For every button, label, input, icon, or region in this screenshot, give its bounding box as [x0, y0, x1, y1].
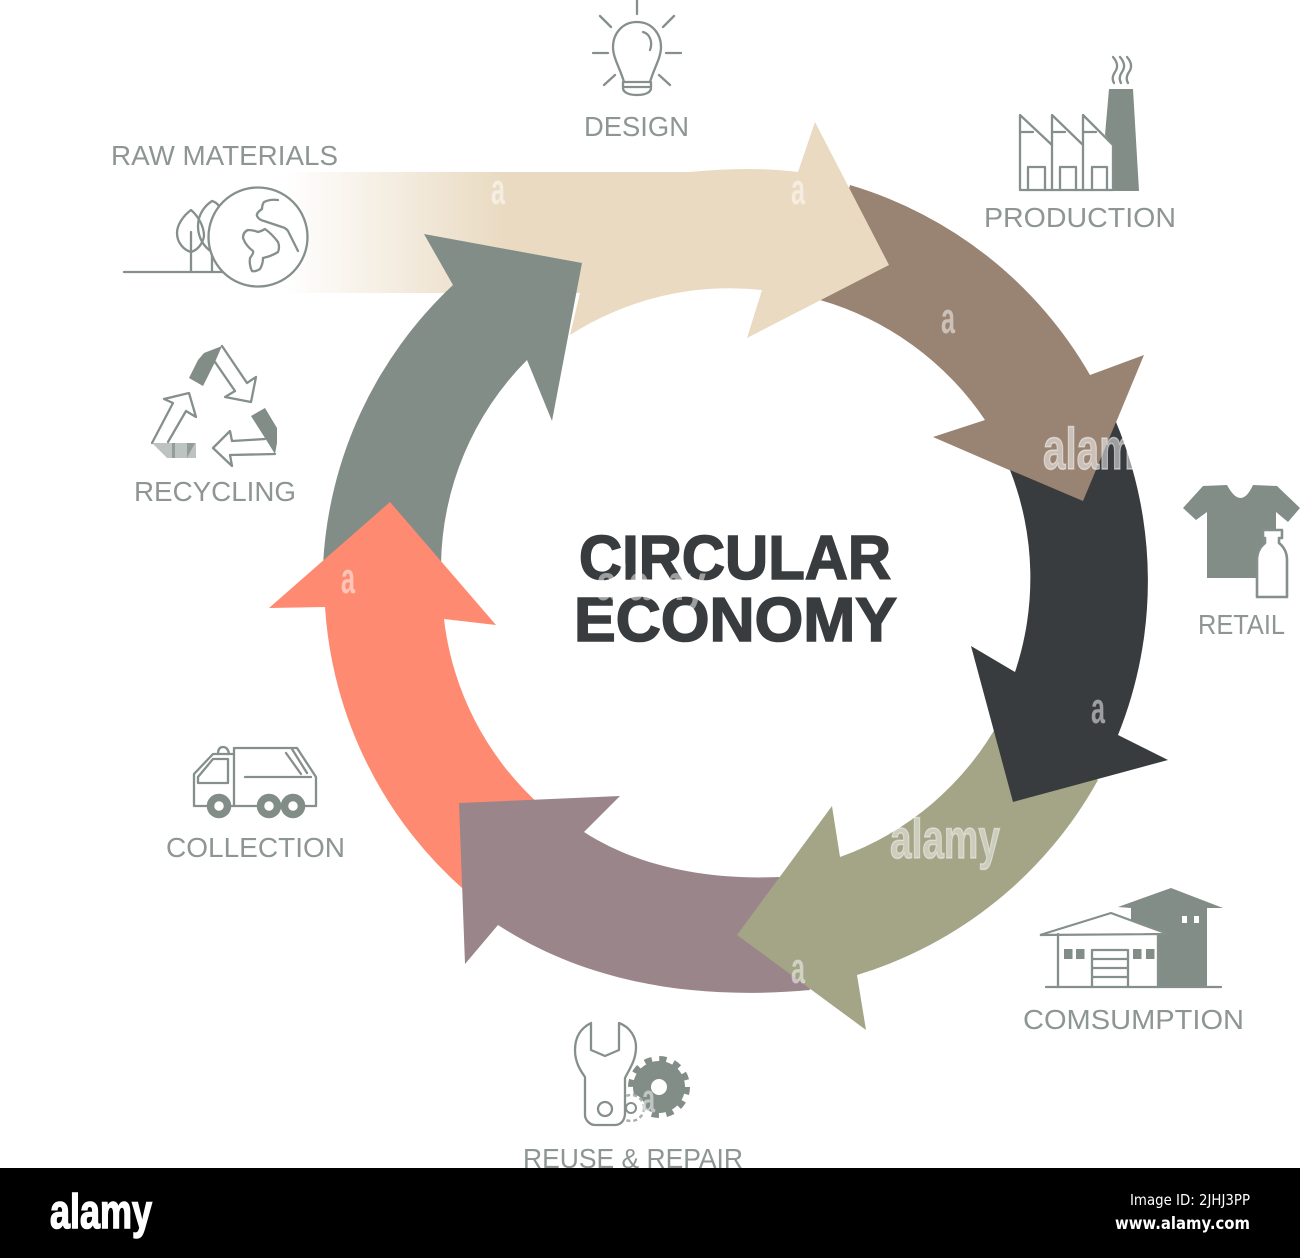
raw materials group — [111, 140, 338, 286]
label: retail: RETAIL — [1198, 609, 1285, 640]
arrow: reuse and repair (mauve) — [459, 796, 810, 993]
icon: t-shirt and bottle — [1183, 485, 1300, 597]
watermarks: a — [1091, 684, 1105, 733]
collection group — [166, 747, 345, 863]
retail group — [1183, 485, 1300, 640]
icon: earth and trees — [124, 188, 308, 286]
label: production: PRODUCTION — [984, 202, 1176, 233]
arrow: production (brown) — [820, 185, 1144, 502]
watermarks: alam — [1043, 417, 1135, 482]
watermarks: alamy — [890, 807, 1000, 870]
arrow: recycling (grey) — [323, 234, 582, 565]
watermarks: a — [941, 294, 955, 343]
label: recycling: RECYCLING — [134, 476, 296, 507]
arrow: retail (charcoal) — [971, 422, 1168, 802]
footer bar — [0, 1168, 1300, 1258]
label: reuse and repair: REUSE & REPAIR — [523, 1143, 743, 1174]
design group — [584, 0, 689, 142]
icon: garbage truck — [194, 747, 316, 814]
icon: wrench and gears: a — [642, 1077, 655, 1121]
icon: warehouse — [1040, 888, 1223, 987]
arrow: raw materials to design (cream with fade) — [285, 122, 889, 338]
title: ECONOMY — [574, 586, 897, 655]
watermarks: a — [491, 165, 505, 214]
icon: recycling arrows — [152, 346, 277, 466]
watermark over title: alamy — [596, 555, 706, 611]
watermarks: a — [791, 944, 805, 993]
icon: factory — [1020, 57, 1139, 191]
consumption group — [1023, 888, 1244, 1035]
title — [574, 524, 897, 655]
icon: wrench and gears — [575, 1023, 687, 1125]
production group — [984, 57, 1176, 233]
website: www.alamy.com — [1115, 1214, 1250, 1234]
label: collection: COLLECTION — [166, 832, 345, 863]
footer logo: alamy — [50, 1186, 152, 1239]
label: consumption: COMSUMPTION — [1023, 1004, 1244, 1035]
watermarks: a — [341, 554, 355, 603]
watermarks: a — [791, 165, 805, 214]
reuse and repair group — [523, 1023, 743, 1174]
watermarks — [341, 165, 1135, 993]
arrow: consumption (olive) — [737, 720, 1098, 1030]
recycling group — [134, 346, 296, 507]
cycle diagram: circular arrows — [269, 122, 1168, 1030]
image id: Image ID: 2JHJ3PP — [1130, 1191, 1250, 1209]
icon: lightbulb — [593, 0, 681, 95]
title: CIRCULAR — [579, 524, 891, 593]
label: design: DESIGN — [584, 111, 689, 142]
label: raw materials: RAW MATERIALS — [111, 140, 338, 171]
arrow: collection (coral) — [269, 502, 540, 895]
